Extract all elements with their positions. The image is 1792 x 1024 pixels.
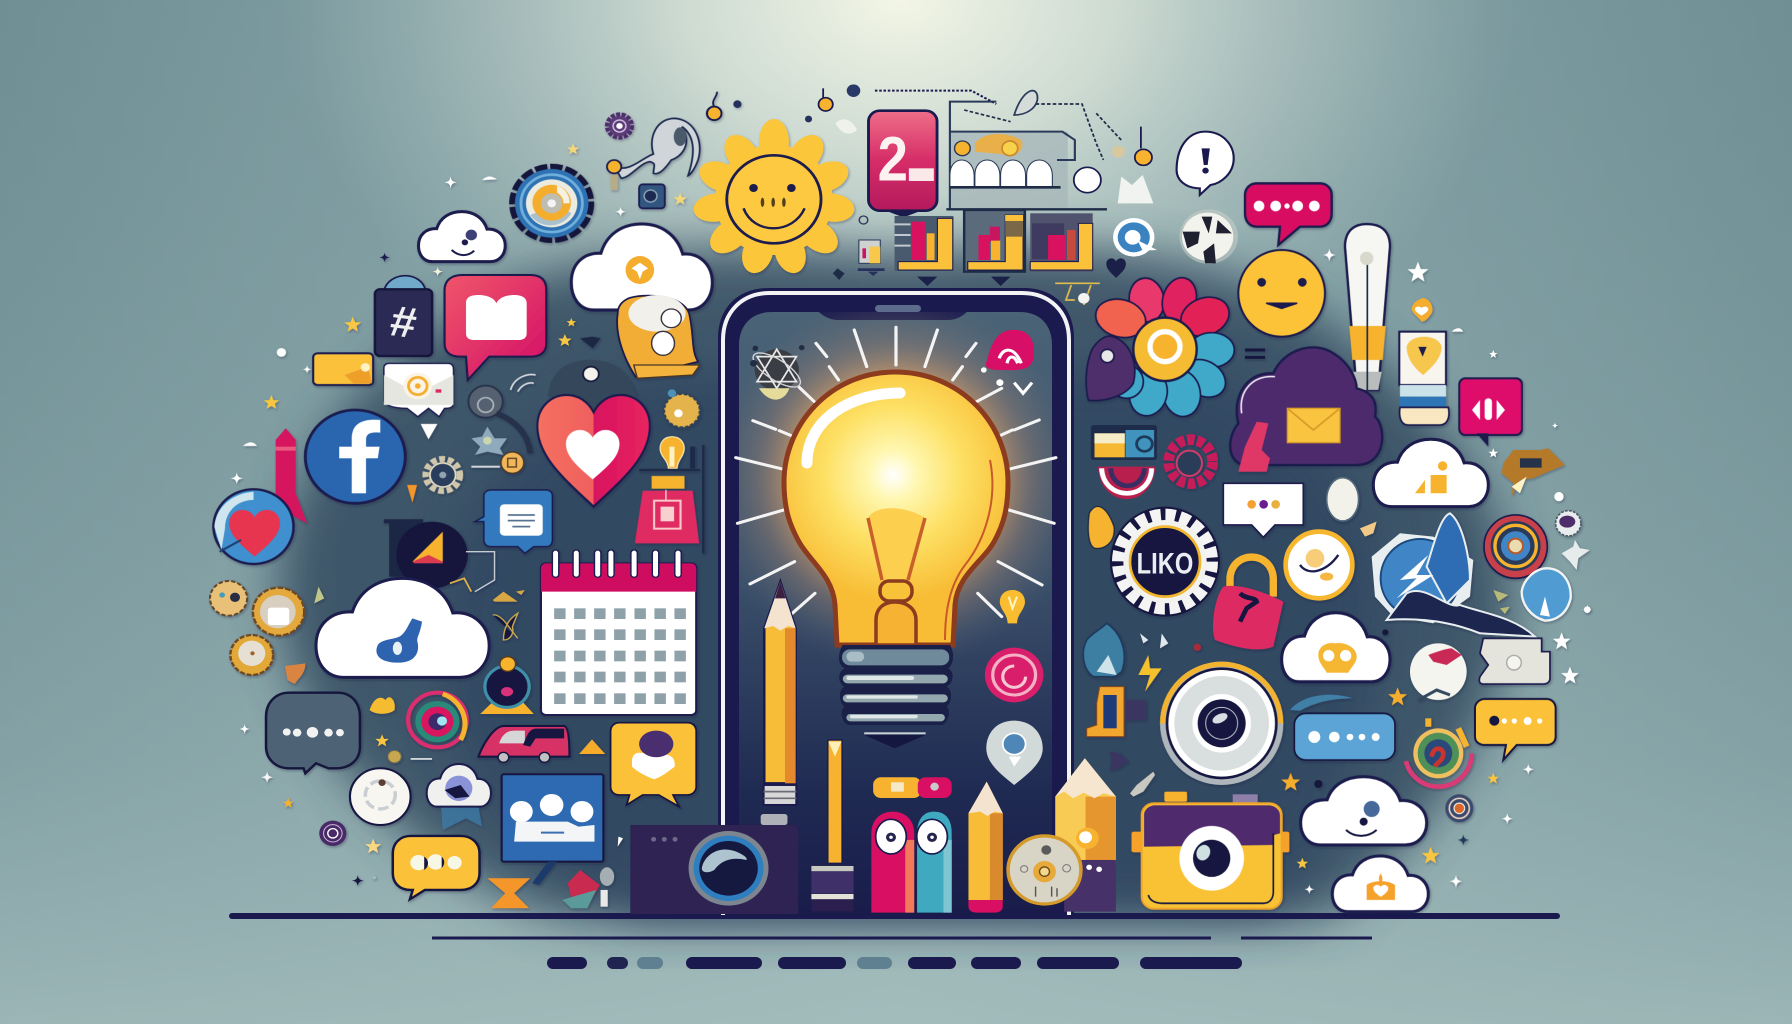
icon: yellow pencil short — [968, 782, 1003, 913]
icon: grey mascot — [607, 118, 700, 190]
icon: webcam — [480, 657, 534, 714]
icon: gear with brand badge — [1110, 507, 1220, 617]
icon: yellow tag — [313, 353, 373, 385]
icon: gear with brand badge: LIKO — [1137, 547, 1193, 580]
icon: magenta book bubble — [445, 275, 546, 380]
chart: three bar panels — [895, 209, 1107, 286]
icon: pink van — [478, 726, 569, 762]
icon: yellow smile — [1238, 250, 1325, 337]
icon: white egg — [1327, 478, 1359, 521]
icon: concentric swirl — [1484, 515, 1547, 578]
icon: golden figure — [617, 295, 700, 378]
icon: dark chat bubble — [266, 693, 360, 773]
icon: blue flower and gold badge — [471, 427, 524, 473]
icon: thin pencil with stand — [811, 740, 854, 911]
icon: white chat card — [1223, 483, 1303, 537]
stars lower right — [1140, 590, 1591, 894]
icon: big lens speaker — [1160, 662, 1283, 785]
bulb screw base — [839, 645, 953, 748]
icon: yellow gear face — [664, 389, 700, 427]
filament — [868, 508, 925, 580]
floor rule and divider lines — [229, 913, 1560, 940]
bulb halo — [739, 312, 1052, 642]
icon: cloud with eyes — [1282, 613, 1390, 682]
icon: flower badge — [1556, 511, 1581, 536]
icon: keyhole bulb — [639, 437, 703, 553]
icon: magenta dots bubble — [1245, 183, 1332, 245]
icon: purple ring — [319, 821, 346, 846]
icon cluster: right upper — [1086, 183, 1592, 649]
chart: mini bars — [833, 216, 885, 280]
icon: swirl ornament — [468, 375, 536, 453]
icon: smiling sun — [692, 119, 856, 277]
diagram: audience and schematic — [950, 91, 1152, 210]
icon: hanging yellow bag — [1088, 506, 1114, 549]
icon: orange drop — [407, 485, 417, 503]
icon: atom — [748, 345, 806, 400]
badge: number two — [869, 111, 937, 217]
icon: magenta pin pencil — [276, 428, 307, 523]
icon: rainbow arc — [1098, 467, 1155, 499]
small stars — [230, 143, 687, 484]
icon cluster: upper left — [214, 92, 741, 588]
icon: blue bolt shark — [1372, 513, 1535, 637]
icon: dome with light — [548, 360, 637, 410]
icon: wide pencil — [1055, 758, 1116, 863]
icon: small camera square — [639, 184, 665, 208]
icon: bottom cloud — [1332, 856, 1428, 912]
icon: gear magenta — [1169, 440, 1213, 484]
icon: gear small — [426, 459, 460, 491]
icon: white crown — [1118, 175, 1153, 203]
icon: cloud with bars — [1373, 439, 1488, 507]
icon: heart medallion — [214, 489, 294, 564]
icon: purple gear — [607, 115, 632, 137]
light rays — [736, 327, 1056, 617]
badge: number two: 2 — [878, 124, 908, 194]
icon: blue chat card — [475, 490, 552, 553]
icon: golden face gears — [210, 581, 305, 684]
icon: magenta signal bubble — [981, 330, 1034, 393]
dark backdrop behind icons — [278, 248, 1513, 918]
stars right upper — [1245, 248, 1592, 614]
icon: small face cloud — [427, 764, 491, 830]
icon: light bulb with rays — [734, 312, 1058, 748]
icon: red bag — [635, 476, 699, 543]
icon: hashtag box — [375, 276, 432, 356]
icon cluster: lower left — [210, 550, 696, 908]
icon: magenta control bubble — [1459, 378, 1522, 447]
icon: purple cloud with envelope — [1230, 347, 1382, 472]
icon: mini camera pair — [1091, 425, 1157, 460]
panel: smartphone — [718, 288, 1074, 915]
icon: big heart — [537, 395, 650, 507]
icon: small bulb, spiral, location pin — [985, 590, 1043, 785]
icon: smiling cloud — [418, 212, 505, 262]
icon: cracked globe — [1179, 209, 1238, 264]
icon: paint brush — [1130, 772, 1155, 797]
icon: orange bowtie — [487, 878, 530, 908]
icon: blue ring — [1113, 218, 1157, 257]
icon: white globe circle — [350, 768, 411, 825]
icon: smile cloud lower — [1301, 777, 1427, 845]
icon: colored spiral — [408, 693, 467, 747]
icon: blue people card — [502, 774, 603, 885]
icon: yellow pin — [707, 92, 741, 120]
icon: teardrop lantern, bolt, bracket — [1083, 623, 1162, 737]
icon cluster: top center — [692, 84, 1238, 549]
icon: yellow medallion — [1286, 532, 1352, 598]
icon cluster: lower right — [1083, 590, 1591, 912]
icon: big white cloud — [316, 578, 489, 677]
icon: yellow dots bubble — [393, 836, 480, 899]
icon: small orbit ring — [1445, 794, 1473, 822]
icon: hashtag box: # — [387, 296, 420, 348]
icon: wall calendar — [541, 550, 696, 715]
icon: pencil large — [764, 582, 796, 805]
icon: yellow face bubble — [611, 723, 696, 807]
icon: blue typing pill — [1290, 695, 1395, 760]
icon: purple box and clock — [1008, 828, 1116, 912]
icon: spiral target — [1405, 718, 1472, 787]
icon: pins and dots above sun — [707, 84, 996, 134]
icon: white ball — [1410, 643, 1467, 700]
icon: blue ring gear — [513, 167, 590, 239]
icon: yellow camera — [1132, 792, 1289, 909]
icon: padlock — [1213, 557, 1283, 649]
icon: dark projector — [384, 519, 468, 588]
bulb glass — [784, 372, 1008, 645]
icon: small red figure — [562, 867, 614, 908]
icon: left camera — [630, 814, 798, 914]
icon: grey storage box — [1479, 638, 1550, 684]
footer dash row — [547, 957, 1242, 969]
phone notch — [815, 308, 970, 320]
stars lower left — [239, 587, 623, 886]
icon: flower with yellow center — [1086, 274, 1235, 420]
icon: purple flower mark — [1110, 752, 1128, 770]
icons on phone screen — [748, 330, 1116, 913]
projector tail and bracket — [450, 552, 495, 592]
icon: mini device — [1399, 332, 1449, 425]
icon: two eyed book characters — [871, 777, 952, 913]
icon: alert bubble — [1177, 132, 1234, 195]
icon: dark heart and small hanger — [1055, 258, 1126, 305]
icon: white target envelope — [384, 363, 453, 417]
icon: orange creature — [1502, 448, 1565, 497]
icon: tall white tube — [1345, 224, 1390, 390]
icon: white large cloud — [571, 224, 712, 310]
icon: yellow notes bubble — [1475, 699, 1556, 760]
icon: blue gem — [1522, 568, 1571, 621]
icon: facebook — [305, 410, 405, 503]
